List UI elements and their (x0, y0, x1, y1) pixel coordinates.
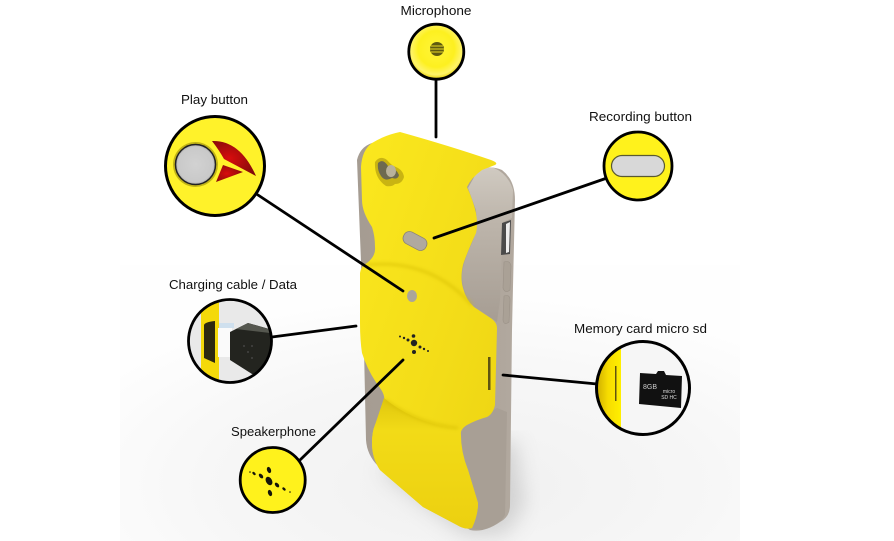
label: Speakerphone: Speakerphone (231, 425, 316, 439)
gray shell (357, 143, 515, 531)
memory slot on case (488, 357, 490, 390)
callout: microphone (409, 24, 464, 79)
yellow back (360, 132, 497, 529)
label: Memory card micro sd: Memory card micro sd (574, 322, 707, 336)
callout: memory card: SD HC (661, 395, 677, 401)
speaker pattern on case (399, 334, 429, 354)
card print: 8GB (643, 384, 657, 391)
side buttons (503, 262, 511, 292)
label: Charging cable / Data: Charging cable / Data (169, 278, 297, 292)
side highlight (462, 167, 513, 322)
phone shadow (378, 440, 525, 535)
phone case (357, 132, 515, 531)
yellow lower panel (372, 398, 478, 529)
camera opening (375, 158, 404, 186)
play button on case (407, 290, 417, 302)
label: Play button: Play button (181, 93, 248, 107)
label: Recording button: Recording button (589, 110, 692, 124)
label: Microphone: Microphone (400, 4, 472, 18)
background floor (120, 265, 740, 541)
callout: recording button (604, 132, 672, 200)
ridge shading (366, 264, 472, 428)
callout: memory card (595, 340, 690, 440)
callout: memory card: micro (663, 389, 675, 395)
callout: play button (166, 116, 264, 216)
usb port (501, 220, 511, 255)
lower right gray panel (461, 408, 507, 530)
callout: speakerphone (240, 448, 305, 512)
callout: charging cable (188, 298, 273, 384)
connector lines (258, 80, 607, 460)
recording button on case (401, 229, 429, 253)
